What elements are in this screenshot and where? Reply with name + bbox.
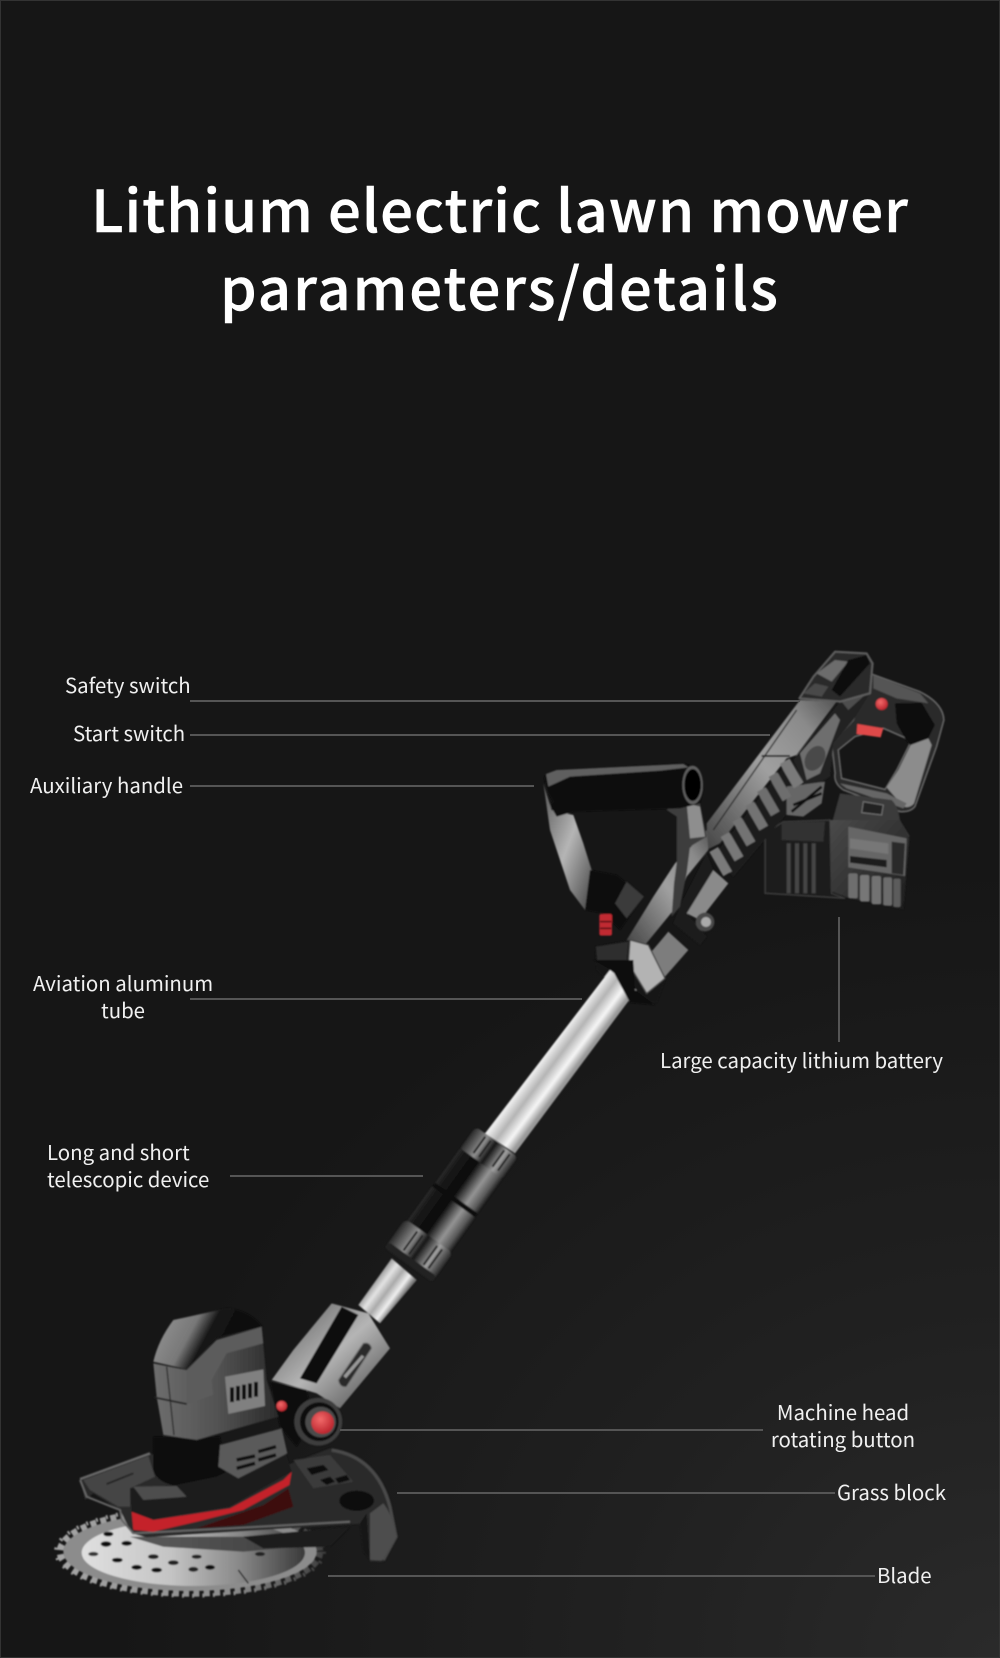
rotating knob [270, 1382, 342, 1447]
blade [56, 1508, 350, 1596]
vent window [225, 1369, 265, 1414]
title [91, 165, 909, 327]
label: auxiliary handle: Auxiliary handle [30, 769, 183, 799]
red knob [599, 914, 612, 936]
leader line: aviation aluminum tube [190, 998, 582, 1000]
leader line: telescopic device [230, 1175, 423, 1177]
label: machine head rotating button: Machine head [777, 1396, 909, 1426]
ribbed grip [713, 763, 807, 877]
right arm of auxiliary handle [667, 793, 707, 917]
bolt [339, 1491, 374, 1511]
handle assembly [543, 652, 944, 1003]
lower body plate [687, 870, 728, 920]
lower tube [358, 1258, 417, 1323]
rear loop handle [832, 673, 944, 812]
leader line: start switch [190, 734, 770, 736]
label: machine head rotating button [771, 1396, 915, 1453]
wing bolt [696, 913, 714, 931]
label: aviation aluminum tube: tube [101, 994, 145, 1024]
aluminum tube and telescopic device [358, 960, 655, 1323]
main body [707, 700, 837, 850]
label: battery: Large capacity lithium battery [660, 1044, 943, 1074]
motor base with red stripe [130, 1428, 293, 1532]
label: blade: Blade [877, 1559, 932, 1589]
leader line: blade [328, 1575, 875, 1577]
connector arm [272, 1303, 390, 1408]
grass block guard [80, 1448, 397, 1562]
label: machine head rotating button: rotating button [771, 1423, 915, 1453]
telescopic device [385, 1125, 521, 1282]
label: telescopic device: Long and short [47, 1136, 190, 1166]
label: start switch: Start switch [73, 717, 185, 747]
label: telescopic device [47, 1136, 209, 1193]
red start trigger [857, 724, 883, 737]
label: aviation aluminum tube [33, 967, 213, 1024]
leader line: auxiliary handle [190, 785, 534, 787]
title: Lithium electric lawn mower [91, 165, 909, 249]
label: telescopic device: telescopic device [47, 1163, 209, 1193]
auxiliary handle [543, 763, 703, 936]
machine head [56, 1303, 397, 1596]
leader line: machine head rotating button [340, 1429, 763, 1431]
title: parameters/details [220, 243, 780, 327]
leader line: safety switch [190, 700, 800, 702]
label: aviation aluminum tube: Aviation aluminum [33, 967, 213, 997]
label: grass block: Grass block [837, 1476, 946, 1506]
leader line: grass block [397, 1492, 835, 1494]
battery pack [765, 793, 910, 909]
leader line: battery [838, 917, 840, 1042]
red switch button [876, 698, 888, 710]
collar [595, 932, 688, 1003]
label: safety switch: Safety switch [65, 669, 191, 699]
motor housing [153, 1308, 278, 1440]
